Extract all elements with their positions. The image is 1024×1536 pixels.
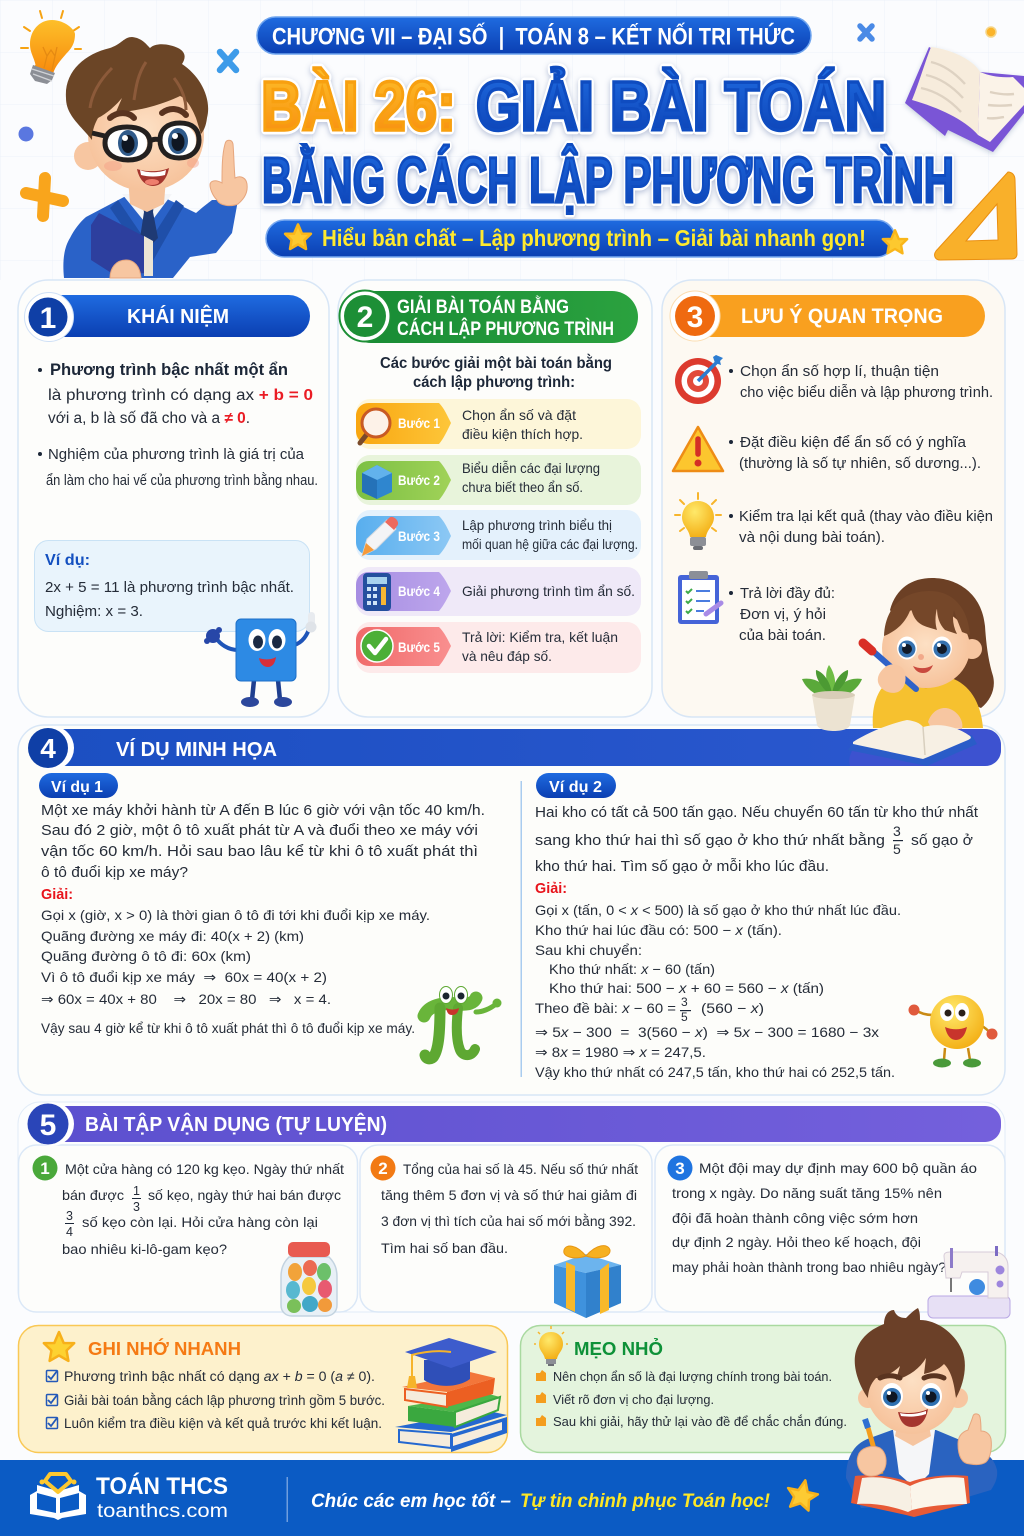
example 1 solution: Quãng đường ô tô đi: 60x (km) [41, 948, 251, 964]
example 1 solution: Quãng đường xe máy đi: 40(x + 2) (km) [41, 928, 304, 944]
boy pointing hand [210, 140, 247, 206]
step 5: Trả lời: Kiểm tra, kết luận [462, 629, 618, 645]
icon: star left of subtitle [285, 224, 311, 249]
example 1 problem text [41, 802, 485, 881]
section 3 header [670, 291, 985, 341]
icon: pencil [362, 517, 398, 556]
icon: light bulb top left [21, 11, 81, 84]
text block: note 3 [729, 508, 993, 546]
boy hair [66, 37, 208, 140]
section 3 header: LƯU Ý QUAN TRỌNG [741, 304, 943, 328]
boy 2 open book [851, 1475, 970, 1517]
girl hand [878, 664, 906, 693]
step 1 [356, 399, 641, 449]
example 2 solution: Vậy kho thứ nhất có 247,5 tấn, kho thứ hai có 252,5 tấn. [535, 1064, 895, 1080]
text block: note 3: và nội dung bài toán). [739, 529, 885, 546]
example 1 problem text: ô tô đuổi kịp xe máy? [41, 864, 188, 881]
icon: gift box [554, 1246, 621, 1318]
example 2 solution: Theo đề bài: x − 60 = [535, 1000, 676, 1016]
step 5 [356, 622, 641, 673]
step 2: Biểu diễn các đại lượng [462, 460, 600, 476]
example 2 problem text: sang kho thứ hai thì số gạo ở kho thứ nhất bằng [535, 832, 885, 849]
boy 2 head [858, 1388, 878, 1408]
panel: section 1 card [18, 280, 329, 717]
example 1 solution: ⇒ 60x = 40x + 80 ⇒ 20x = 80 ⇒ x = 4. [41, 991, 331, 1007]
tips list: Sau khi giải, hãy thử lại vào đề để chắc chắn đúng. [553, 1414, 847, 1429]
exercise 3 text: trong x ngày. Do năng suất tăng 15% nên [672, 1185, 942, 1201]
icon: blue book mascot [204, 612, 316, 707]
illustration: open book top right [905, 47, 1024, 152]
step 3 [356, 510, 641, 560]
icon: warning triangle [673, 427, 723, 471]
exercise 2 text: tăng thêm 5 đơn vị và số thứ hai giảm đi [381, 1187, 637, 1203]
text block: note 4: của bài toán. [739, 627, 826, 644]
icon: blue dot [18, 126, 34, 142]
girl mouth [913, 665, 933, 673]
example 1 solution: Giải: [41, 886, 73, 903]
girl bangs [884, 591, 970, 636]
text block: note 2 [729, 434, 981, 472]
example 2 problem text: số gạo ở [911, 832, 973, 849]
section 4 header band [28, 726, 1001, 770]
exercise 2 text: Tìm hai số ban đầu. [381, 1240, 508, 1256]
example 2 solution [535, 880, 901, 1080]
memo checklist: Giải bài toán bằng cách lập phương trình gồm 5 bước. [64, 1393, 385, 1408]
step 2 [356, 455, 641, 505]
text block: concept definition [38, 361, 318, 489]
divider between examples [520, 781, 522, 1077]
subtitle pill [266, 220, 895, 257]
icon: target with dart [675, 355, 723, 404]
tips list [536, 1369, 847, 1429]
exercise 1 text: 1 [133, 1184, 140, 1198]
text block: note 1: Chọn ẩn số hợp lí, thuận tiện [740, 363, 939, 380]
chapter pill: CHƯƠNG VII – ĐẠI SỐ | TOÁN 8 – KẾT NỐI TRI THỨC [272, 22, 795, 50]
illustration: potted plant [802, 665, 862, 731]
text block: note 2: (thường là số tự nhiên, số dương...). [739, 455, 981, 472]
example 2 solution: Kho thứ nhất: x − 60 (tấn) [549, 961, 715, 977]
example 2 solution: 3 [681, 995, 688, 1009]
section 5 header band: BÀI TẬP VẬN DỤNG (TỰ LUYỆN) [85, 1112, 387, 1136]
step 1: Chọn ẩn số và đặt [462, 407, 576, 423]
callout: concept example: Ví dụ: [45, 552, 90, 569]
text block: note 4: Đơn vị, ý hỏi [740, 606, 826, 623]
title line 1: GIẢI BÀI TOÁN [476, 67, 886, 145]
panel: quick memo [18, 1326, 508, 1452]
callout: concept example: Nghiệm: x = 3. [45, 603, 143, 620]
icon: blue multiply sign left [220, 52, 236, 70]
text block: note 3: Kiểm tra lại kết quả (thay vào điều kiện [739, 508, 993, 525]
exercise 1 text [62, 1161, 344, 1257]
girl pen [866, 645, 916, 689]
example 2 solution: (560 − x) [701, 1000, 764, 1016]
panel: section 5 background [18, 1102, 1005, 1312]
section 2 header: CÁCH LẬP PHƯƠNG TRÌNH [397, 318, 614, 340]
example 2 pill [536, 773, 616, 798]
memo checklist [46, 1369, 385, 1431]
example 2 pill: Ví dụ 2 [549, 779, 602, 796]
girl back hair [890, 578, 994, 708]
step 2: Bước 2 [398, 472, 440, 488]
chapter pill [257, 17, 811, 54]
exercise card 3 [655, 1145, 1005, 1312]
example 2 problem text: 5 [893, 841, 901, 857]
text block: concept definition: với a, b là số đã cho và a ≠ 0. [48, 410, 250, 427]
icon: sewing machine [928, 1246, 1010, 1318]
panel: section 2 card [338, 280, 652, 717]
boy book [91, 213, 153, 274]
exercise 1 text: bao nhiêu ki-lô-gam kẹo? [62, 1241, 227, 1257]
memo heading: GHI NHỚ NHANH [88, 1338, 241, 1359]
girl eyes [897, 636, 917, 660]
example 1 solution: Vậy sau 4 giờ kể từ khi ô tô xuất phát thì ô tô đuổi kịp xe máy. [41, 1020, 415, 1036]
icon: tips bulb [534, 1326, 568, 1366]
exercise 1 text: bán được [62, 1187, 124, 1203]
icon: blue cube [362, 465, 392, 499]
icon: magnifying glass [360, 409, 390, 443]
example 2 problem text: 3 [893, 823, 901, 839]
tips list: Nên chọn ẩn số là đại lượng chính trong bài toán. [553, 1369, 832, 1384]
exercise card 2 [360, 1145, 652, 1312]
section 5 header band: 5 [40, 1109, 56, 1142]
illustration: boy with glasses pointing [63, 37, 247, 278]
title line 1: BÀI 26: [261, 67, 456, 145]
exercise 1 text: số kẹo còn lại. Hỏi cửa hàng còn lại [82, 1214, 318, 1230]
boy 2 jacket [846, 1430, 997, 1508]
footer brand [96, 1472, 228, 1522]
title line 1: GIẢI BÀI TOÁN [476, 67, 886, 145]
illustration: purple splash on band [849, 729, 1001, 766]
section 2 header: 2 [357, 301, 373, 334]
exercise 1 badge: 1 [40, 1159, 50, 1178]
text block: note 4: Trả lời đầy đủ: [740, 585, 835, 602]
example 2 solution: ⇒ 8x = 1980 ⇒ x = 247,5. [535, 1044, 706, 1060]
panel: section 4 card [18, 725, 1005, 1095]
title line 1 [261, 67, 886, 145]
example 2 problem text: kho thứ hai. Tìm số gạo ở mỗi kho lúc đầu. [535, 858, 829, 875]
example 1 problem text: Sau đó 2 giờ, một ô tô xuất phát từ A và đuổi theo xe máy với [41, 822, 478, 839]
step 4 [356, 567, 641, 616]
exercise 3 badge: 3 [675, 1159, 685, 1178]
icon: memo star [44, 1332, 74, 1361]
heading: steps intro: Các bước giải một bài toán bằng [380, 354, 612, 372]
example 1 solution: Vì ô tô đuổi kịp xe máy ⇒ 60x = 40(x + 2) [41, 969, 327, 985]
example 2 solution: Kho thứ hai: 500 − x + 60 = 560 − x (tấn) [549, 980, 824, 996]
tips heading: MẸO NHỎ [574, 1338, 663, 1359]
footer slogan: Chúc các em học tốt – [311, 1491, 511, 1512]
exercise 3 text: may phải hoàn thành trong bao nhiêu ngày? [672, 1259, 946, 1275]
exercise 3 text: đội đã hoàn thành công việc sớm hơn [672, 1210, 918, 1226]
example 2 [535, 773, 979, 1080]
step 5: và nêu đáp số. [462, 648, 552, 664]
girl head [962, 639, 982, 659]
footer brand: TOÁN THCS [96, 1472, 228, 1500]
text block: note 1: cho việc biểu diễn và lập phương trình. [740, 384, 993, 401]
icon: footer star [784, 1477, 820, 1512]
example 2 problem text [535, 804, 979, 875]
title line 1: BÀI 26: [261, 67, 456, 145]
icon: light bulb note [675, 493, 721, 550]
section 1 header [24, 292, 310, 342]
section 1 header: 1 [40, 302, 56, 335]
exercise 1 badge [32, 1156, 58, 1180]
icon: clipboard checklist [678, 571, 721, 624]
exercise 1 text: 3 [66, 1209, 73, 1223]
exercise 2 text: 3 đơn vị thì tích của hai số mới bằng 392. [381, 1213, 636, 1229]
boy 2 hair [855, 1308, 965, 1398]
panel: quick tips [520, 1326, 1006, 1452]
exercise 1 text: 3 [133, 1200, 140, 1214]
example 1 [39, 773, 485, 1036]
memo checklist: Phương trình bậc nhất có dạng ax + b = 0 (a ≠ 0). [64, 1369, 375, 1384]
footer brand: toanthcs.com [97, 1501, 228, 1522]
step 2: chưa biết theo ẩn số. [462, 479, 583, 495]
subtitle pill: Hiểu bản chất – Lập phương trình – Giải bài nhanh gọn! [322, 225, 866, 251]
heading: steps intro [380, 354, 612, 391]
exercise 1 text: số kẹo, ngày thứ hai bán được [148, 1187, 341, 1203]
example 2 solution: ⇒ 5x − 300 = 3(560 − x) ⇒ 5 x − 300 = 1680 − 3x [535, 1024, 879, 1040]
example 2 problem text: Hai kho có tất cả 500 tấn gạo. Nếu chuyển 60 tấn từ kho thứ nhất [535, 804, 979, 821]
step 3: Bước 3 [398, 528, 440, 544]
footer slogan: Tự tin chinh phục Toán học! [520, 1491, 770, 1512]
callout: concept example: 2x + 5 = 11 là phương trình bậc nhất. [45, 579, 294, 596]
icon: blue multiply sign right [860, 26, 872, 39]
panel: section 3 card [662, 280, 1005, 717]
boy 2 eyes [881, 1383, 903, 1409]
exercise 2 badge: 2 [378, 1159, 388, 1178]
memo checklist: Luôn kiểm tra điều kiện và kết quả trước khi kết luận. [64, 1416, 382, 1431]
step 1: điều kiện thích hợp. [462, 426, 583, 442]
icon: calculator [363, 573, 391, 611]
boy eyebrows [110, 109, 186, 118]
text block: note 4 [729, 585, 835, 644]
callout: concept example [34, 540, 310, 632]
text block: concept definition: ẩn làm cho hai vế của phương trình bằng nhau. [46, 472, 318, 489]
section 3 header: 3 [687, 301, 703, 334]
text block: note 1 [729, 363, 993, 401]
icon: candy jar [281, 1242, 337, 1316]
icon: green check circle [361, 630, 393, 662]
exercise 2 text [381, 1161, 638, 1256]
section 1 header: KHÁI NIỆM [127, 304, 229, 328]
illustration: girl with pen [848, 578, 994, 766]
example 2 solution: Gọi x (tấn, 0 < x < 500) là số gạo ở kho thứ nhất lúc đầu. [535, 902, 901, 918]
footer slogan [311, 1491, 770, 1512]
exercise 2 badge [370, 1156, 396, 1180]
footer band [0, 1460, 1024, 1536]
exercise 1 text: 4 [66, 1225, 73, 1239]
exercise 3 text: Một đội may dự định may 600 bộ quần áo [699, 1160, 977, 1176]
icon: yellow smiley mascot [908, 995, 998, 1068]
example 1 problem text: vận tốc 60 km/h. Hỏi sau bao lâu kể từ khi ô tô xuất phát thì [41, 843, 478, 860]
section 4 header band: 4 [40, 733, 56, 764]
example 1 solution: Gọi x (giờ, x > 0) là thời gian ô tô đi tới khi đuổi kịp xe máy. [41, 907, 430, 923]
exercise 2 text: Tổng của hai số là 45. Nếu số thứ nhất [403, 1161, 638, 1177]
footer logo [30, 1474, 86, 1520]
boy glasses and eyes [107, 126, 147, 160]
text block: note 2: Đặt điều kiện để ẩn số có ý nghĩa [740, 434, 967, 451]
boy 2 pen and hand [867, 1424, 881, 1474]
step 1: Bước 1 [398, 415, 440, 431]
step 4: Giải phương trình tìm ẩn số. [462, 583, 635, 599]
icon: pi mascot [424, 986, 502, 1059]
boy 2 thumbs up [958, 1414, 991, 1465]
icon: star right of subtitle [883, 230, 907, 253]
example 1 problem text: Một xe máy khởi hành từ A đến B lúc 6 giờ với vận tốc 40 km/h. [41, 802, 485, 819]
boy mouth [137, 168, 169, 186]
step 3: mối quan hệ giữa các đại lượng. [462, 536, 638, 552]
section 4 header band: VÍ DỤ MINH HỌA [116, 738, 277, 761]
text block: concept definition: là phương trình có dạng ax + b = 0 [48, 387, 313, 404]
icon: orange plus sign [26, 178, 63, 216]
girl sweater [873, 672, 983, 728]
section 2 header: GIẢI BÀI TOÁN BẰNG [397, 296, 569, 318]
boy 2 mouth [898, 1409, 928, 1427]
example 1 pill [39, 773, 118, 798]
example 2 solution: Sau khi chuyển: [535, 942, 642, 958]
exercise 3 text [672, 1160, 977, 1275]
step 3: Lập phương trình biểu thị [462, 517, 612, 533]
heading: steps intro: cách lập phương trình: [413, 374, 575, 391]
icon: stack of books with graduation cap [395, 1338, 507, 1452]
example 2 solution: 5 [681, 1010, 688, 1024]
icon: orange dot [986, 27, 996, 37]
step 4: Bước 4 [398, 583, 440, 599]
text block: concept definition: Phương trình bậc nhất một ẩn [50, 361, 288, 379]
exercise 1 text: Một cửa hàng có 120 kg kẹo. Ngày thứ nhất [65, 1161, 344, 1177]
example 2 solution: Giải: [535, 880, 567, 897]
girl open book [848, 735, 977, 766]
example 2 solution: Kho thứ hai lúc đầu có: 500 − x (tấn). [535, 922, 782, 938]
exercise 3 badge [668, 1156, 692, 1180]
illustration: triangle ruler [935, 172, 1017, 260]
section 2 header [340, 290, 638, 343]
tips list: Viết rõ đơn vị cho đại lượng. [553, 1392, 714, 1407]
illustration: boy with book and thumb up [846, 1308, 997, 1517]
text block: concept definition: Nghiệm của phương trình là giá trị của [48, 446, 305, 463]
boy body [63, 197, 238, 278]
example 1 solution [41, 886, 430, 1036]
boy head [74, 142, 102, 170]
exercise card 1 [18, 1145, 358, 1312]
step 5: Bước 5 [398, 639, 440, 655]
exercise 3 text: dự định 2 ngày. Hỏi theo kế hoạch, đội [672, 1234, 921, 1250]
section 5 header band [28, 1102, 1001, 1146]
footer divider [286, 1477, 288, 1522]
example 1 pill: Ví dụ 1 [51, 779, 103, 796]
